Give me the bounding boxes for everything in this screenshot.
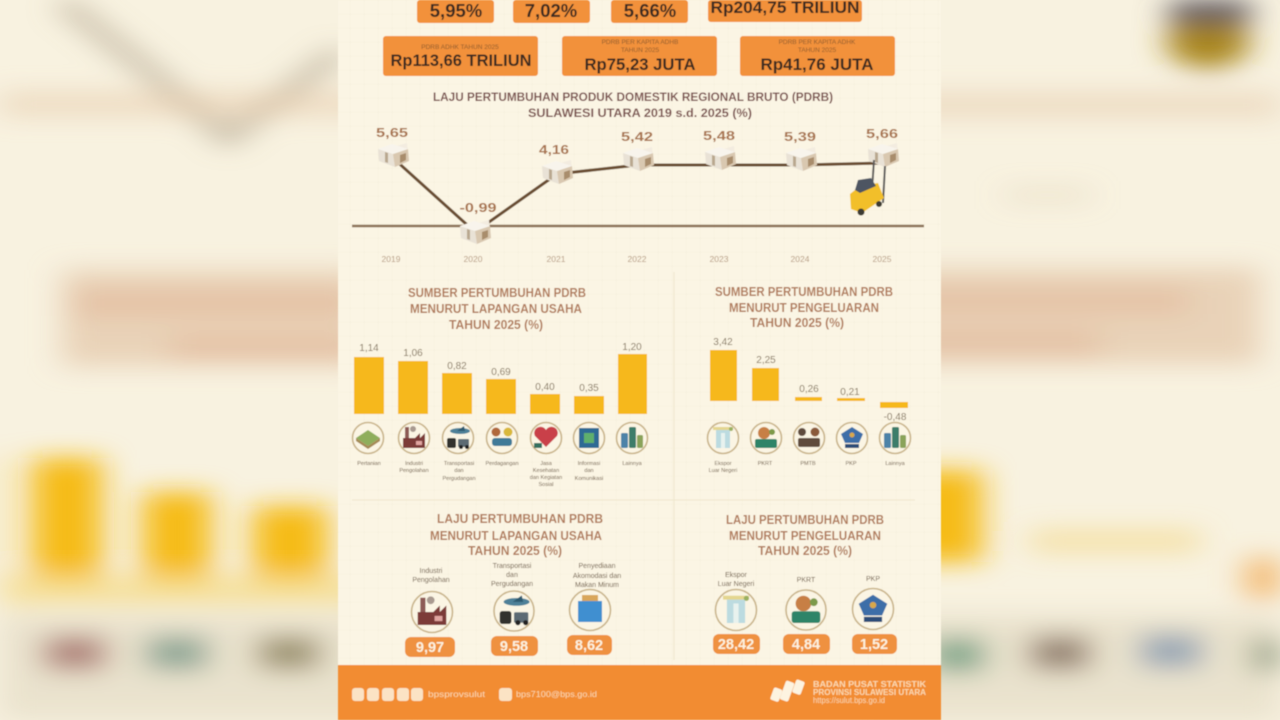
icons and labels: lapangan usaha: Pergudangan — [442, 476, 476, 482]
top row stat boxes: 5,95% — [430, 0, 482, 21]
icons and labels: lapangan usaha: dan Kegiatan — [530, 475, 562, 481]
stat box: PDRB ADHK — [383, 36, 538, 76]
growth items: lapangan usaha: 8,62 — [575, 638, 603, 654]
growth items: lapangan usaha — [405, 563, 621, 657]
line chart: PDRB growth 2019-2025: 2020 — [464, 254, 483, 264]
heading: sumber pertumbuhan pengeluaran: TAHUN 2025 (%) — [750, 316, 844, 330]
icons and labels: lapangan usaha: Kesehatan — [533, 468, 559, 474]
heading: sumber pertumbuhan pengeluaran: SUMBER PERTUMBUHAN PDRB — [715, 285, 893, 299]
line chart: PDRB growth 2019-2025: 2021 — [547, 254, 566, 264]
line chart: PDRB growth 2019-2025: 2022 — [628, 254, 647, 264]
bar chart: sumber pertumbuhan lapangan usaha: 1,14 — [359, 343, 379, 354]
stat box: PDRB per kapita ADHK — [740, 36, 895, 76]
icons and labels: pengeluaran: Lainnya — [885, 461, 906, 467]
line chart: PDRB growth 2019-2025: 4,16 — [539, 143, 569, 157]
stat box: PDRB per kapita ADHB — [562, 36, 717, 76]
icons and labels: lapangan usaha: Transportasi — [444, 461, 474, 467]
heading: sumber pertumbuhan lapangan usaha — [408, 286, 586, 332]
bar chart: sumber pertumbuhan lapangan usaha: 1,06 — [403, 348, 423, 359]
icons and labels: pengeluaran: PKP — [845, 461, 857, 467]
stat box: PDRB per kapita ADHB: TAHUN 2025 — [621, 47, 659, 54]
growth items: lapangan usaha: 9,97 — [416, 640, 444, 656]
bar chart: sumber pertumbuhan lapangan usaha: 0,40 — [535, 382, 555, 393]
bar chart: sumber pertumbuhan pengeluaran: 0,21 — [840, 387, 860, 398]
icons and labels: lapangan usaha: Pengolahan — [399, 468, 429, 474]
footer — [338, 665, 941, 720]
footer: https://sulut.bps.go.id — [813, 696, 885, 705]
top row stat boxes: 5,66% — [624, 0, 676, 21]
line chart: PDRB growth 2019-2025: 2024 — [791, 254, 810, 264]
bar chart: sumber pertumbuhan lapangan usaha: 0,69 — [491, 367, 511, 378]
stat box: PDRB per kapita ADHB: PDRB PER KAPITA ADHB — [602, 39, 678, 46]
growth items: pengeluaran — [713, 572, 897, 654]
heading: sumber pertumbuhan lapangan usaha: TAHUN 2025 (%) — [449, 318, 543, 332]
footer: bpsprovsulut — [428, 690, 486, 699]
line chart heading: LAJU PERTUMBUHAN PRODUK DOMESTIK REGIONAL BRUTO (PDRB) — [433, 92, 833, 104]
divider lines — [352, 272, 915, 660]
social media icons — [352, 688, 512, 701]
heading: laju pertumbuhan pengeluaran — [726, 513, 884, 558]
icons and labels: lapangan usaha: Sosial — [539, 482, 553, 488]
growth items: pengeluaran: 28,42 — [718, 637, 754, 653]
growth items: pengeluaran: PKP — [866, 576, 880, 583]
line chart: PDRB growth 2019-2025: 2025 — [873, 254, 892, 264]
footer: PROVINSI SULAWESI UTARA — [813, 688, 926, 697]
growth items: lapangan usaha: 9,58 — [500, 639, 528, 655]
icons and labels: pengeluaran: PMTB — [800, 461, 816, 467]
icons and labels: lapangan usaha: dan — [454, 468, 464, 474]
stat box: PDRB per kapita ADHK: Rp41,76 JUTA — [760, 55, 874, 74]
bar chart: sumber pertumbuhan pengeluaran: -0,48 — [884, 412, 907, 423]
icons and labels: lapangan usaha: dan — [584, 468, 594, 474]
heading: sumber pertumbuhan lapangan usaha: MENURUT LAPANGAN USAHA — [410, 302, 582, 316]
icon: BPS logo — [770, 679, 805, 702]
growth items: lapangan usaha: Akomodasi dan — [573, 573, 621, 580]
growth items: pengeluaran: PKRT — [797, 577, 816, 584]
line chart: PDRB growth 2019-2025 — [352, 126, 924, 264]
growth items: lapangan usaha: Transportasi — [493, 563, 532, 570]
footer: bps7100@bps.go.id — [516, 690, 597, 699]
icons and labels: pengeluaran: PKRT — [758, 461, 773, 467]
icons and labels: lapangan usaha: Pertanian — [357, 461, 381, 467]
stat box: PDRB ADHK: PDRB ADHK TAHUN 2025 — [421, 44, 499, 51]
heading: laju pertumbuhan lapangan usaha: TAHUN 2025 (%) — [468, 544, 562, 558]
blurred backdrop: right side — [900, 0, 1280, 720]
icons and labels: pengeluaran — [708, 422, 910, 474]
heading: laju pertumbuhan pengeluaran: TAHUN 2025 (%) — [758, 544, 852, 558]
stat box: PDRB per kapita ADHK: PDRB PER KAPITA ADHK — [779, 39, 856, 46]
growth items: lapangan usaha: dan — [506, 572, 518, 579]
line chart: PDRB growth 2019-2025: 5,42 — [621, 130, 653, 144]
growth items: pengeluaran: Ekspor — [725, 572, 748, 579]
bar chart: sumber pertumbuhan pengeluaran — [710, 337, 908, 423]
stat box: PDRB per kapita ADHB: Rp75,23 JUTA — [584, 55, 696, 74]
line chart: PDRB growth 2019-2025: -0,99 — [460, 201, 497, 215]
growth items: lapangan usaha: Pergudangan — [491, 581, 533, 588]
icon: forklift — [850, 160, 885, 216]
heading: laju pertumbuhan pengeluaran: LAJU PERTUMBUHAN PDRB — [726, 513, 884, 527]
icons and labels: lapangan usaha: Industri — [405, 461, 423, 467]
line chart: PDRB growth 2019-2025: 5,66 — [866, 127, 898, 141]
growth items: pengeluaran: 1,52 — [860, 637, 888, 653]
icons and labels: lapangan usaha: Perdagangan — [485, 461, 519, 467]
heading: laju pertumbuhan lapangan usaha — [430, 512, 603, 558]
icons and labels: lapangan usaha: Informasi — [578, 461, 600, 467]
growth items: lapangan usaha: Industri — [420, 568, 443, 575]
bar chart: sumber pertumbuhan pengeluaran: 0,26 — [799, 384, 819, 395]
heading: laju pertumbuhan lapangan usaha: LAJU PERTUMBUHAN PDRB — [437, 512, 603, 526]
stat box: PDRB ADHK: Rp113,66 TRILIUN — [390, 51, 532, 70]
bar chart: sumber pertumbuhan pengeluaran: 2,25 — [756, 355, 776, 366]
icons and labels: lapangan usaha: Komunikasi — [575, 476, 603, 482]
bar chart: sumber pertumbuhan pengeluaran: 3,42 — [713, 337, 733, 348]
line chart: PDRB growth 2019-2025: 5,48 — [703, 129, 735, 143]
bar chart: sumber pertumbuhan lapangan usaha — [354, 342, 647, 414]
heading: sumber pertumbuhan lapangan usaha: SUMBER PERTUMBUHAN PDRB — [408, 286, 586, 300]
line chart: PDRB growth 2019-2025: 5,39 — [784, 130, 816, 144]
icons and labels: lapangan usaha: Lainnya — [622, 461, 643, 467]
growth items: pengeluaran: 4,84 — [792, 637, 820, 653]
footer: BADAN PUSAT STATISTIK — [813, 680, 926, 689]
top row stat boxes: 7,02% — [525, 0, 577, 21]
bar chart: sumber pertumbuhan lapangan usaha: 1,20 — [622, 342, 642, 353]
line chart: PDRB growth 2019-2025: 5,65 — [376, 126, 408, 140]
top row stat boxes — [417, 0, 862, 23]
growth items: lapangan usaha: Penyediaan — [579, 563, 616, 570]
growth items: lapangan usaha: Pengolahan — [412, 577, 450, 584]
heading: sumber pertumbuhan pengeluaran — [715, 285, 893, 330]
heading: laju pertumbuhan lapangan usaha: MENURUT LAPANGAN USAHA — [430, 529, 602, 543]
heading: laju pertumbuhan pengeluaran: MENURUT PENGELUARAN — [729, 529, 881, 543]
line chart: PDRB growth 2019-2025: 2023 — [710, 254, 729, 264]
icons and labels: lapangan usaha — [352, 422, 648, 488]
line chart heading: SULAWESI UTARA 2019 s.d. 2025 (%) — [528, 108, 752, 120]
main infographic panel — [338, 0, 941, 720]
stat box: PDRB per kapita ADHK: TAHUN 2025 — [798, 47, 836, 54]
icons and labels: pengeluaran: Ekspor — [714, 461, 732, 467]
growth items: lapangan usaha: Makan Minum — [575, 582, 619, 589]
line chart heading — [433, 92, 833, 120]
growth items: pengeluaran: Luar Negeri — [718, 581, 755, 588]
line chart: PDRB growth 2019-2025: 2019 — [382, 254, 401, 264]
bar chart: sumber pertumbuhan lapangan usaha: 0,82 — [447, 361, 467, 372]
bar chart: sumber pertumbuhan lapangan usaha: 0,35 — [579, 383, 599, 394]
icons and labels: pengeluaran: Luar Negeri — [709, 468, 737, 474]
icons and labels: lapangan usaha: Jasa — [540, 461, 553, 467]
heading: sumber pertumbuhan pengeluaran: MENURUT PENGELUARAN — [729, 301, 879, 315]
blurred backdrop: left side — [0, 2, 380, 720]
